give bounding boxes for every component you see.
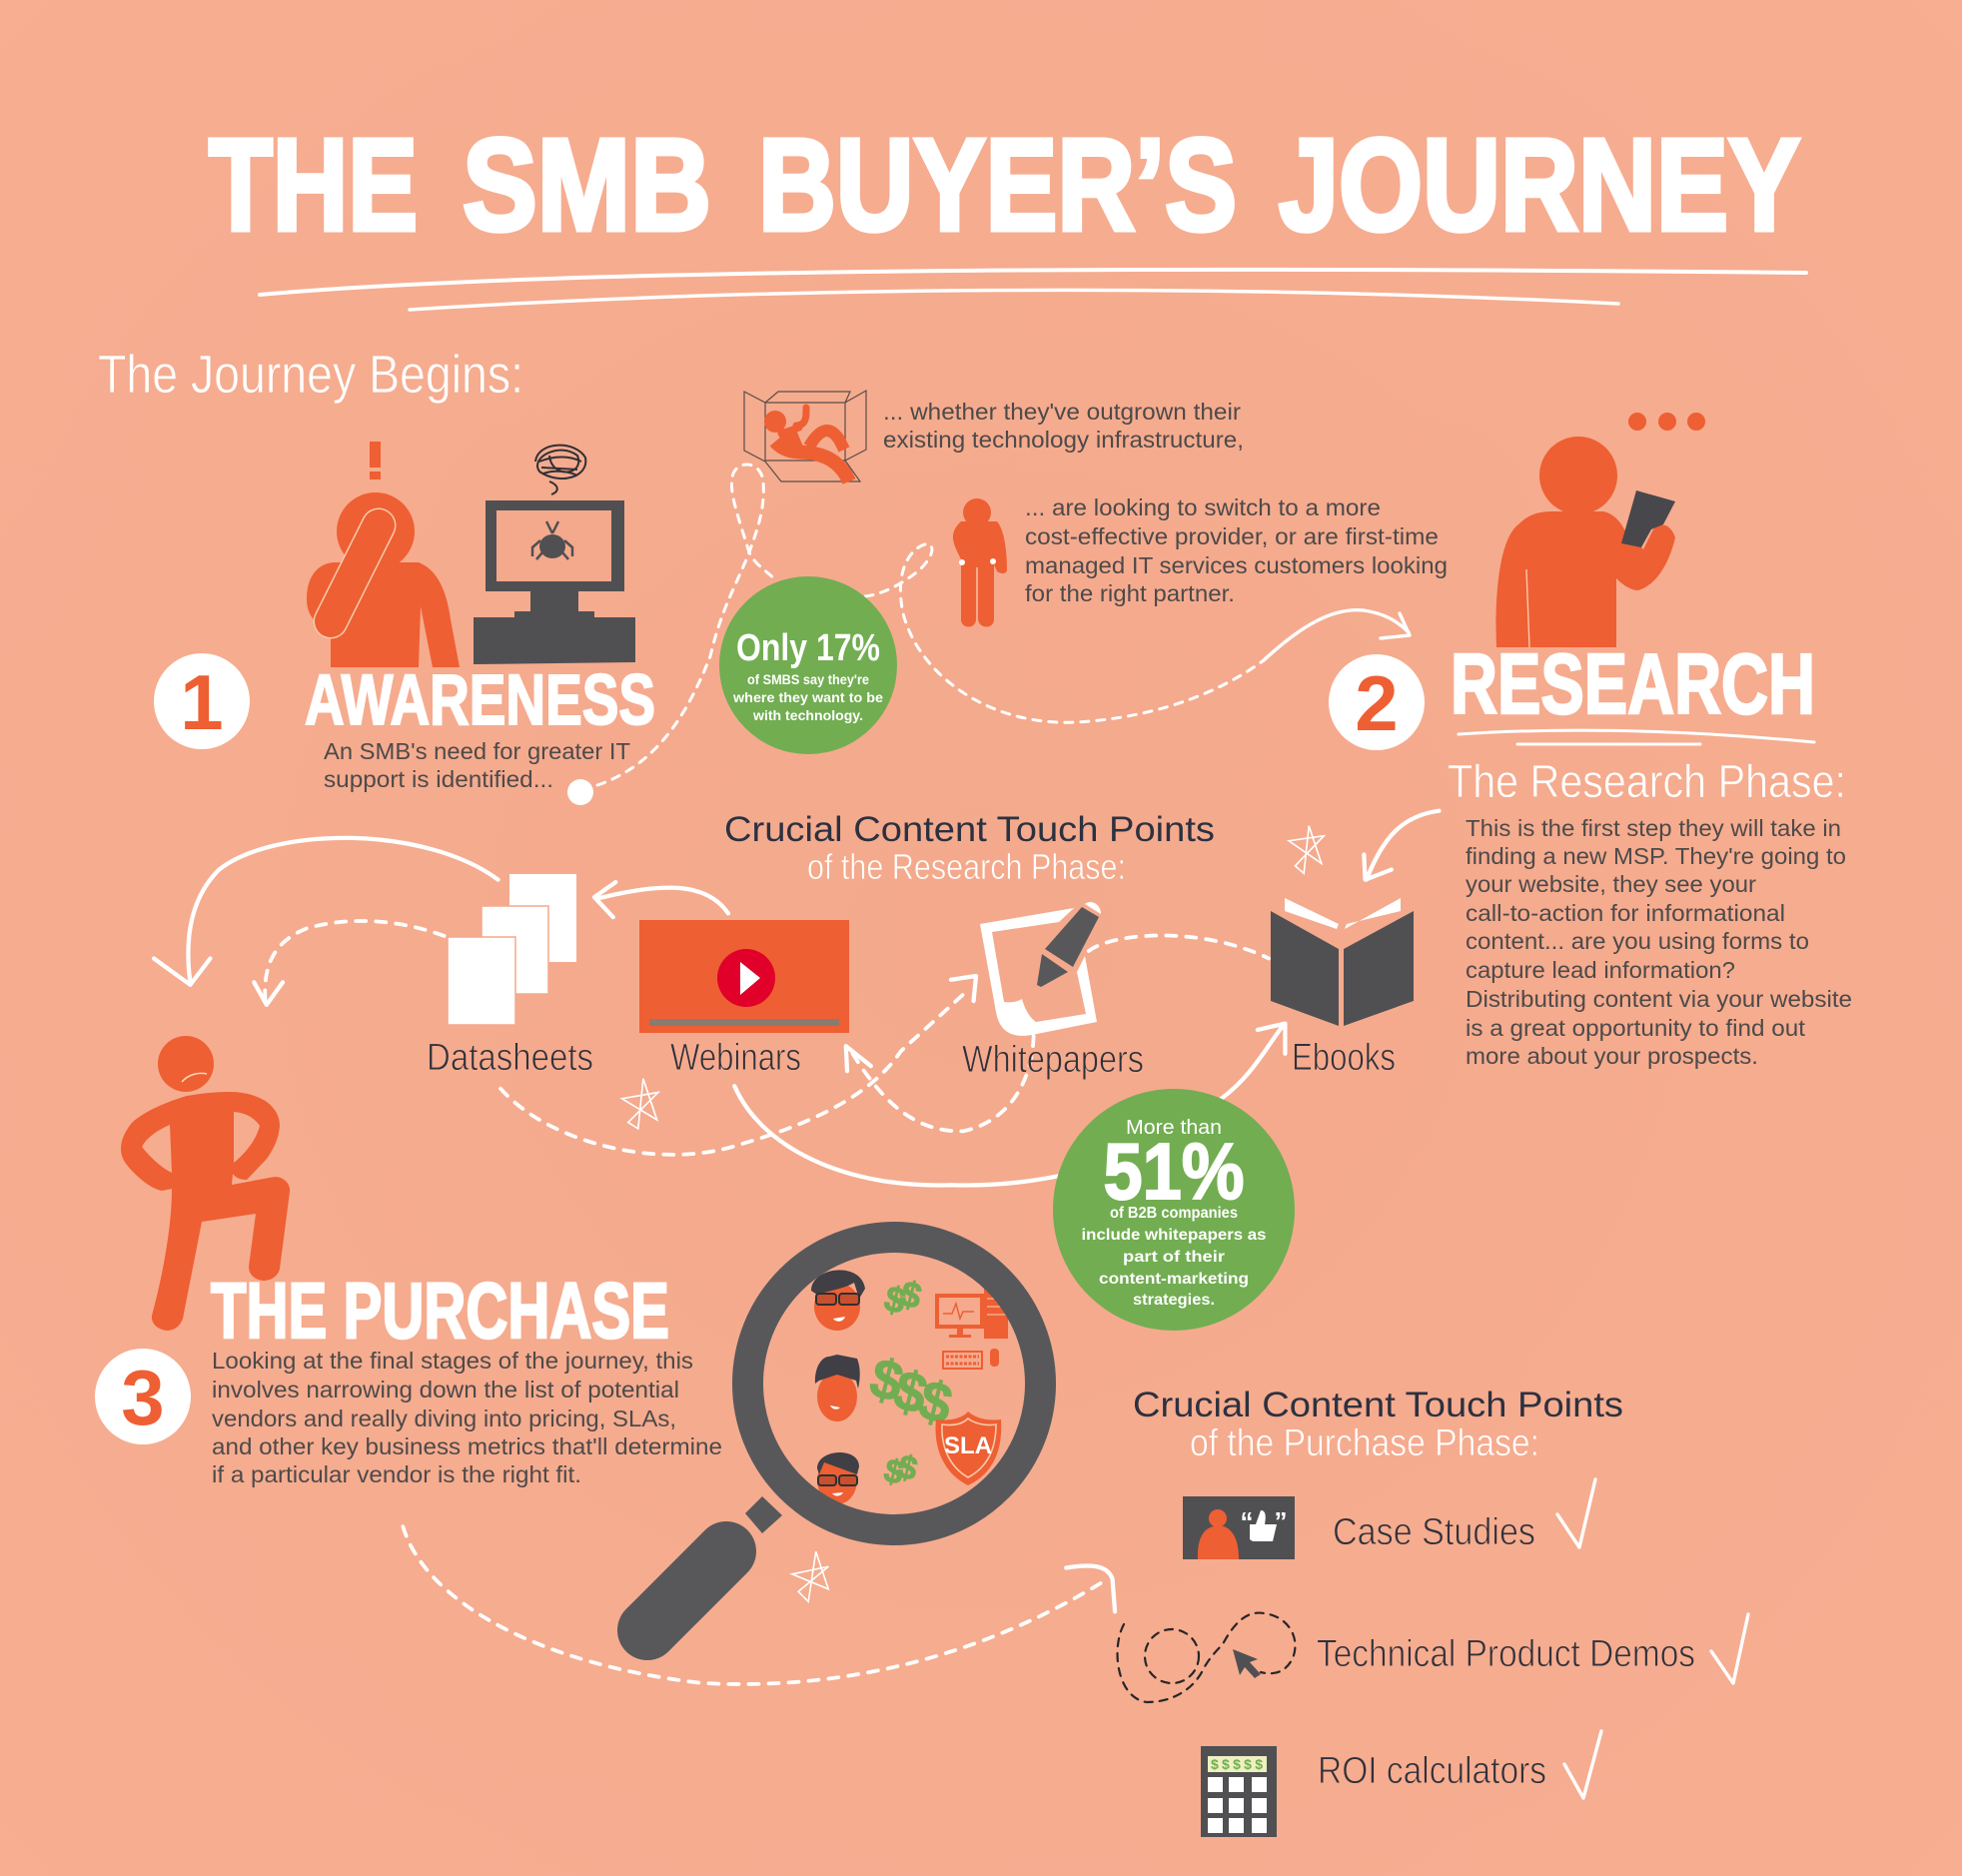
dollar signs: $ [880,1451,907,1491]
heading: research: RESEARCH [1451,637,1815,732]
callout: more than 51 percent: 51% [1103,1127,1245,1216]
text: research phase description: content... are you using forms to [1466,928,1809,954]
callout: more than 51 percent: of B2B companies [1110,1205,1238,1222]
number badge 2 [1329,654,1425,750]
title: JOURNEY [1279,111,1800,258]
callout: more than 51 percent [1053,1089,1295,1331]
dollar signs: $ [896,1273,926,1317]
text: research phase description: your website, they see your [1466,871,1756,897]
heading: the journey begins: The Journey Begins: [98,345,523,405]
title: BUYER’S [758,111,1237,258]
vendor face 1 [811,1270,865,1331]
text: purchase description: Looking at the final stages of the journey, this [212,1348,693,1374]
heading: touch points of the research phase: of the Research Phase: [807,846,1126,887]
labels: research content types: Webinars [670,1037,801,1079]
heading: touch points of the purchase phase: of the Purchase Phase: [1190,1422,1539,1464]
callout: only 17 percent: where they want to be [732,689,883,705]
text: awareness description [324,738,630,792]
callout: more than 51 percent: More than [1126,1117,1222,1139]
label: case studies with check: Case Studies [1333,1511,1535,1553]
arrows: research content flow [154,838,1285,1185]
callout: only 17 percent: of SMBS say they're [747,671,869,687]
lens ring [747,1237,1041,1530]
heading: awareness: AWARENESS [305,661,655,740]
icon: person with hands on hips [121,1036,290,1331]
label: technical product demos with check [1317,1614,1748,1683]
icon: ROI calculator [1201,1746,1277,1837]
number badge 1: 1 [180,658,224,746]
label: ROI calculators with check: ROI calculators [1318,1750,1546,1792]
text: switching provider: cost-effective provider, or are first-time [1025,523,1439,549]
callout: only 17 percent: Only 17% [736,627,880,669]
icon: whitepaper and pen [980,902,1101,1036]
icon: orange computer [935,1289,1008,1369]
heading: touch points of the research phase [724,810,1215,887]
labels: research content types [427,1037,1396,1081]
label: ROI calculators with check [1318,1731,1601,1798]
text: purchase description: vendors and really diving into pricing, SLAs, [212,1406,676,1431]
title [209,111,1806,310]
vendor face 3 [817,1452,859,1504]
heading: the research phase: The Research Phase: [1448,755,1846,807]
callout: more than 51 percent: content-marketing [1099,1271,1249,1288]
dollar signs: $ [894,1447,921,1487]
labels: research content types: Ebooks [1292,1037,1396,1079]
labels: research content types: Whitepapers [962,1039,1144,1081]
text: awareness description: support is identified... [324,766,553,792]
heading: touch points of the research phase: Crucial Content Touch Points [724,810,1215,849]
text: research phase description: call-to-action for informational [1466,900,1785,926]
dollar signs: $ [913,1368,958,1435]
icon: ROI calculator: $$$$$ [1211,1756,1263,1772]
text: research phase description: more about your prospects. [1466,1043,1758,1069]
arrow: research phase to ebooks [1364,811,1439,880]
text: outgrown infrastructure: existing technology infrastructure, [883,427,1244,453]
text: switching provider: for the right partner. [1025,580,1235,606]
label: technical product demos with check: Technical Product Demos [1317,1633,1695,1675]
text: purchase description [212,1348,722,1487]
title: THE [209,111,418,258]
text: research phase description: Distributing content via your website [1466,986,1852,1012]
handle [745,1496,782,1533]
text: purchase description: and other key business metrics that'll determine [212,1433,722,1459]
magnifying glass with vendors [647,1237,1041,1630]
text: switching provider: managed IT services customers looking [1025,552,1448,578]
decorative stars [622,826,1324,1601]
text: purchase description: involves narrowing down the list of potential [212,1377,679,1403]
icon: case studies [1183,1496,1295,1559]
icon: ebook [1271,898,1414,1026]
heading: touch points of the purchase phase [1133,1386,1623,1464]
icon: computer with bug [474,446,635,664]
dollar signs: $ [864,1346,909,1413]
icon: small standing person [953,498,1007,627]
journey path: awareness dashed route [567,465,1410,805]
callout: only 17 percent [719,576,897,754]
text: research phase description: capture lead information? [1466,957,1735,983]
icon: webinar player [639,920,849,1033]
text: outgrown infrastructure: ... whether they've outgrown their [883,399,1241,425]
icon: SLA shield [936,1411,1001,1485]
icon: person researching on tablet [1496,413,1705,647]
number badge 2: 2 [1355,659,1399,747]
heading: the purchase: THE PURCHASE [211,1266,669,1355]
text: research phase description [1466,815,1852,1069]
icon: person with exclamation [307,442,460,667]
text: research phase description: is a great opportunity to find out [1466,1015,1806,1041]
text: purchase description: if a particular vendor is the right fit. [212,1461,581,1487]
text: research phase description: This is the first step they will take in [1466,815,1841,841]
icon: person in a box [744,391,866,481]
text: awareness description: An SMB's need for greater IT [324,738,630,764]
icon: case studies: ” [1275,1506,1287,1536]
title: SMB [463,111,711,258]
icon: dashed infinity with cursor [1118,1613,1295,1702]
dollar signs: $ [888,1358,933,1425]
labels: research content types: Datasheets [427,1037,593,1079]
number badge 3: 3 [121,1354,165,1441]
text: research phase description: finding a new MSP. They're going to [1466,843,1846,869]
icon: case studies: “ [1241,1506,1253,1536]
number badge 3 [95,1349,191,1444]
label: case studies with check [1333,1479,1595,1553]
dollar signs [864,1273,958,1491]
icon: SLA shield: SLA [944,1432,992,1459]
text: switching provider [1025,494,1448,606]
icon: datasheets [448,874,576,1025]
text: switching provider: ... are looking to switch to a more [1025,494,1381,520]
callout: more than 51 percent: part of their [1123,1249,1225,1266]
number badge 1 [154,653,250,749]
text: outgrown infrastructure [883,399,1244,453]
arrow: purchase to touch points [403,1526,1115,1684]
callout: only 17 percent: with technology. [752,707,863,723]
callout: more than 51 percent: strategies. [1133,1292,1215,1309]
dollar signs: $ [880,1278,910,1322]
vendor face 2 [815,1355,860,1421]
heading: touch points of the purchase phase: Crucial Content Touch Points [1133,1386,1623,1424]
heading: research [1451,637,1815,744]
callout: more than 51 percent: include whitepapers as [1081,1227,1267,1244]
